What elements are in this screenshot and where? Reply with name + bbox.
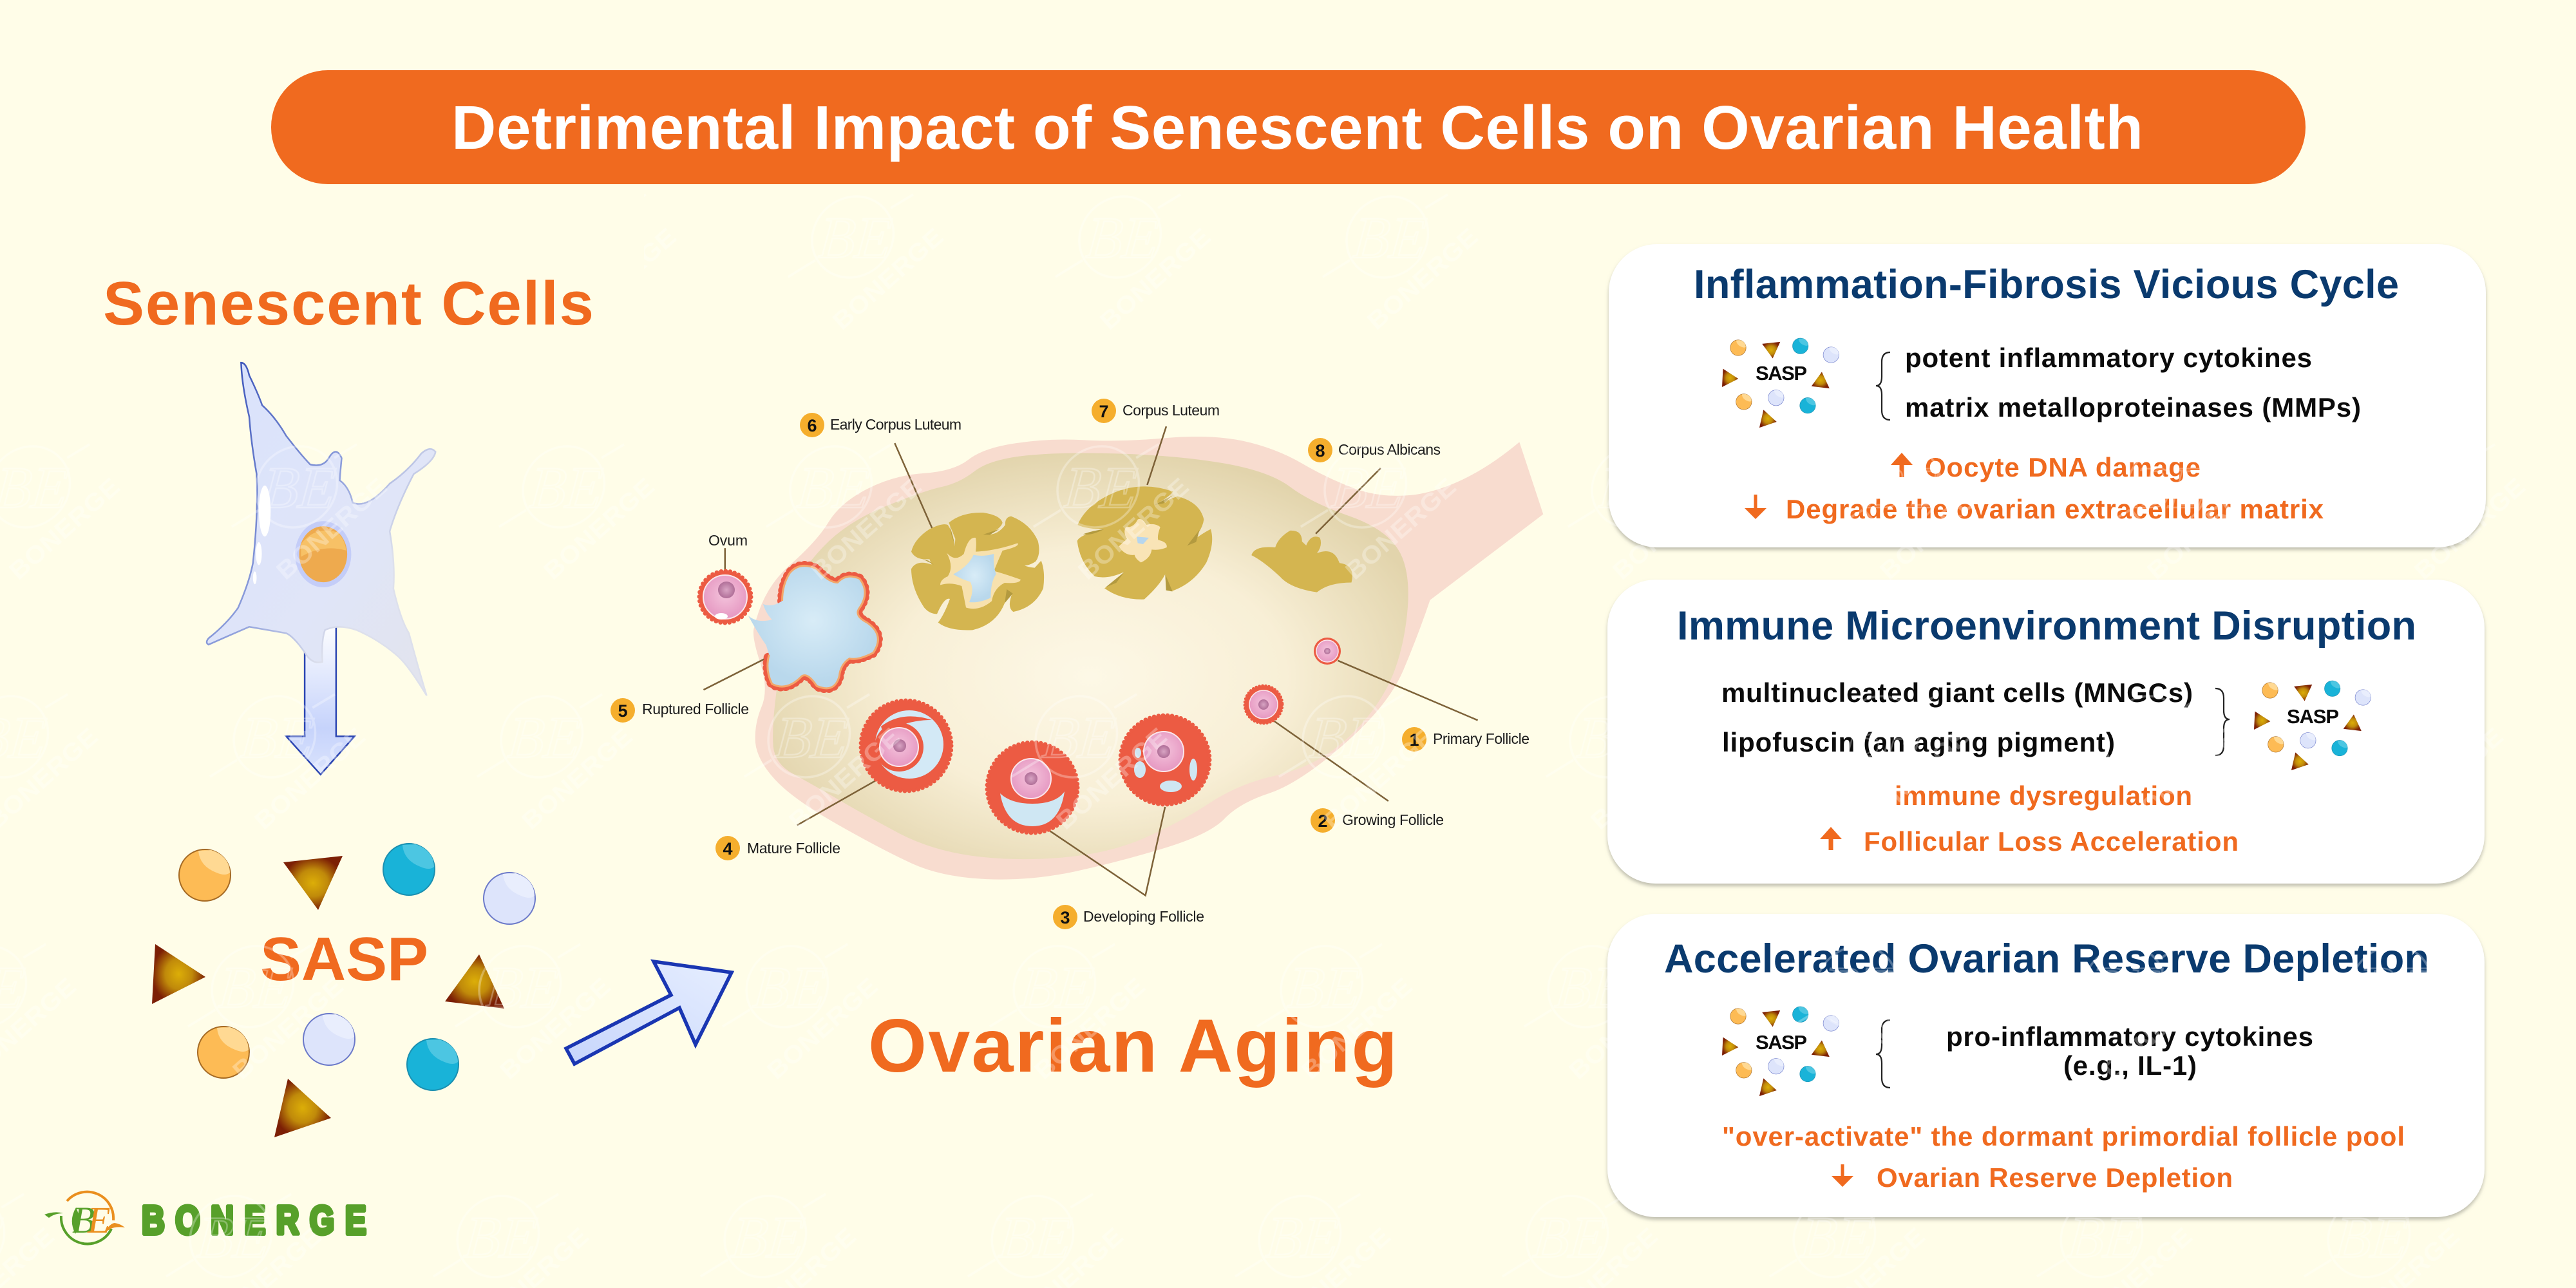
label: 6 early corpus luteum bbox=[800, 413, 961, 437]
heading: senescent cells: Senescent Cells bbox=[103, 269, 594, 338]
arrow up bbox=[1820, 827, 1842, 850]
card heading: Inflammation-Fibrosis Vicious Cycle bbox=[1694, 262, 2399, 307]
text: cytokines: potent inflammatory cytokines bbox=[1905, 343, 2312, 373]
label: 2 growing follicle bbox=[1311, 808, 1444, 833]
growing follicle bbox=[1245, 686, 1282, 723]
text: oocyte DNA damage: Oocyte DNA damage bbox=[1925, 452, 2201, 482]
label: 3 developing follicle: 3 bbox=[1060, 908, 1070, 927]
logo emblem: E bbox=[87, 1199, 110, 1241]
text: ovarian reserve depletion: Ovarian Reserve Depletion bbox=[1877, 1162, 2233, 1193]
label: 6 early corpus luteum: Early Corpus Luteum bbox=[830, 416, 961, 433]
mini SASP icon bbox=[2254, 681, 2371, 770]
arrow up bbox=[1891, 453, 1913, 477]
mini SASP icon: SASP bbox=[1756, 1031, 1807, 1054]
logo emblem bbox=[44, 1192, 125, 1244]
label: ovum: Ovum bbox=[708, 532, 748, 549]
mature follicle bbox=[861, 701, 951, 791]
logo emblem: B bbox=[72, 1199, 95, 1241]
logo wordmark: BONERGE bbox=[142, 1198, 366, 1242]
label: 6 early corpus luteum: 6 bbox=[807, 416, 817, 435]
developing follicle A bbox=[987, 743, 1077, 833]
text: degrade matrix: Degrade the ovarian extracellular matrix bbox=[1786, 494, 2324, 524]
label: 4 mature follicle bbox=[715, 836, 840, 860]
developing follicle B bbox=[1121, 715, 1209, 804]
mini SASP icon: SASP bbox=[2287, 705, 2339, 728]
label: 5 ruptured follicle bbox=[611, 698, 749, 723]
label: 5 ruptured follicle: Ruptured Follicle bbox=[642, 701, 749, 717]
text: lipofuscin: lipofuscin (an aging pigment) bbox=[1722, 727, 2115, 757]
arrow: cell to SASP bbox=[286, 620, 355, 775]
mini SASP icon bbox=[1722, 1007, 1839, 1096]
panel: accelerated ovarian reserve depletion bbox=[1607, 914, 2485, 1217]
leader lines bbox=[703, 426, 1478, 896]
ovum bbox=[699, 571, 751, 623]
label: 5 ruptured follicle: 5 bbox=[618, 701, 628, 721]
ovary diagram bbox=[611, 399, 1543, 929]
brace bbox=[1876, 1020, 1890, 1088]
label: 2 growing follicle: Growing Follicle bbox=[1342, 811, 1444, 828]
ruptured follicle bbox=[748, 565, 878, 688]
label: 7 corpus luteum: 7 bbox=[1099, 402, 1109, 421]
label: 4 mature follicle: 4 bbox=[723, 839, 733, 858]
ovary body bbox=[703, 426, 1543, 896]
text: follicular loss: Follicular Loss Acceleration bbox=[1864, 826, 2239, 857]
early corpus luteum bbox=[911, 513, 1044, 630]
card heading: Immune Microenvironment Disruption bbox=[1677, 603, 2416, 649]
text: over-activate: "over-activate" the dormant primordial follicle pool bbox=[1722, 1121, 2405, 1151]
mini SASP icon bbox=[1722, 338, 1839, 428]
icon: senescent cell bbox=[207, 363, 435, 696]
brace bbox=[1876, 352, 1890, 420]
text: MNGCs: multinucleated giant cells (MNGCs) bbox=[1721, 677, 2193, 708]
brace bbox=[2215, 688, 2230, 755]
arrow: SASP to ovarian aging bbox=[566, 961, 732, 1064]
label: 3 developing follicle bbox=[1053, 905, 1204, 929]
text: pro-inflammatory cytokines: pro-inflammatory cytokines bbox=[1946, 1021, 2313, 1052]
mini SASP icon: SASP bbox=[1756, 362, 1807, 384]
SASP label: SASP bbox=[260, 925, 428, 994]
label: 4 mature follicle: Mature Follicle bbox=[747, 840, 840, 857]
panel: immune microenvironment disruption bbox=[1607, 580, 2485, 884]
label: 3 developing follicle: Developing Follicle bbox=[1083, 908, 1204, 925]
SASP cluster bbox=[152, 844, 535, 1137]
card heading: Accelerated Ovarian Reserve Depletion bbox=[1664, 936, 2429, 981]
corpus luteum bbox=[1077, 486, 1212, 600]
label: 1 primary follicle: Primary Follicle bbox=[1433, 730, 1530, 747]
label: 8 corpus albicans bbox=[1308, 438, 1441, 462]
label: 2 growing follicle: 2 bbox=[1318, 811, 1328, 831]
heading: ovarian aging: Ovarian Aging bbox=[868, 1003, 1397, 1088]
text: MMPs: matrix metalloproteinases (MMPs) bbox=[1905, 392, 2361, 422]
arrow down bbox=[1745, 495, 1766, 519]
corpus albicans bbox=[1251, 531, 1352, 592]
label: 7 corpus luteum bbox=[1092, 399, 1220, 423]
arrow down bbox=[1832, 1164, 1853, 1187]
label: 1 primary follicle: 1 bbox=[1409, 730, 1419, 750]
logo: Bonerge bbox=[44, 1192, 366, 1244]
panel: inflammation-fibrosis vicious cycle bbox=[1609, 244, 2486, 547]
label: 8 corpus albicans: Corpus Albicans bbox=[1338, 441, 1441, 458]
label: 1 primary follicle bbox=[1402, 727, 1530, 752]
text: IL-1: (e.g., IL-1) bbox=[2063, 1050, 2197, 1081]
title banner bbox=[271, 70, 2306, 184]
text: immune dysregulation: immune dysregulation bbox=[1895, 781, 2192, 811]
primary follicle bbox=[1314, 638, 1341, 665]
title: Detrimental Impact of Senescent Cells on Ovarian Health bbox=[451, 93, 2143, 162]
label: 8 corpus albicans: 8 bbox=[1315, 441, 1325, 460]
label: 7 corpus luteum: Corpus Luteum bbox=[1122, 402, 1220, 419]
